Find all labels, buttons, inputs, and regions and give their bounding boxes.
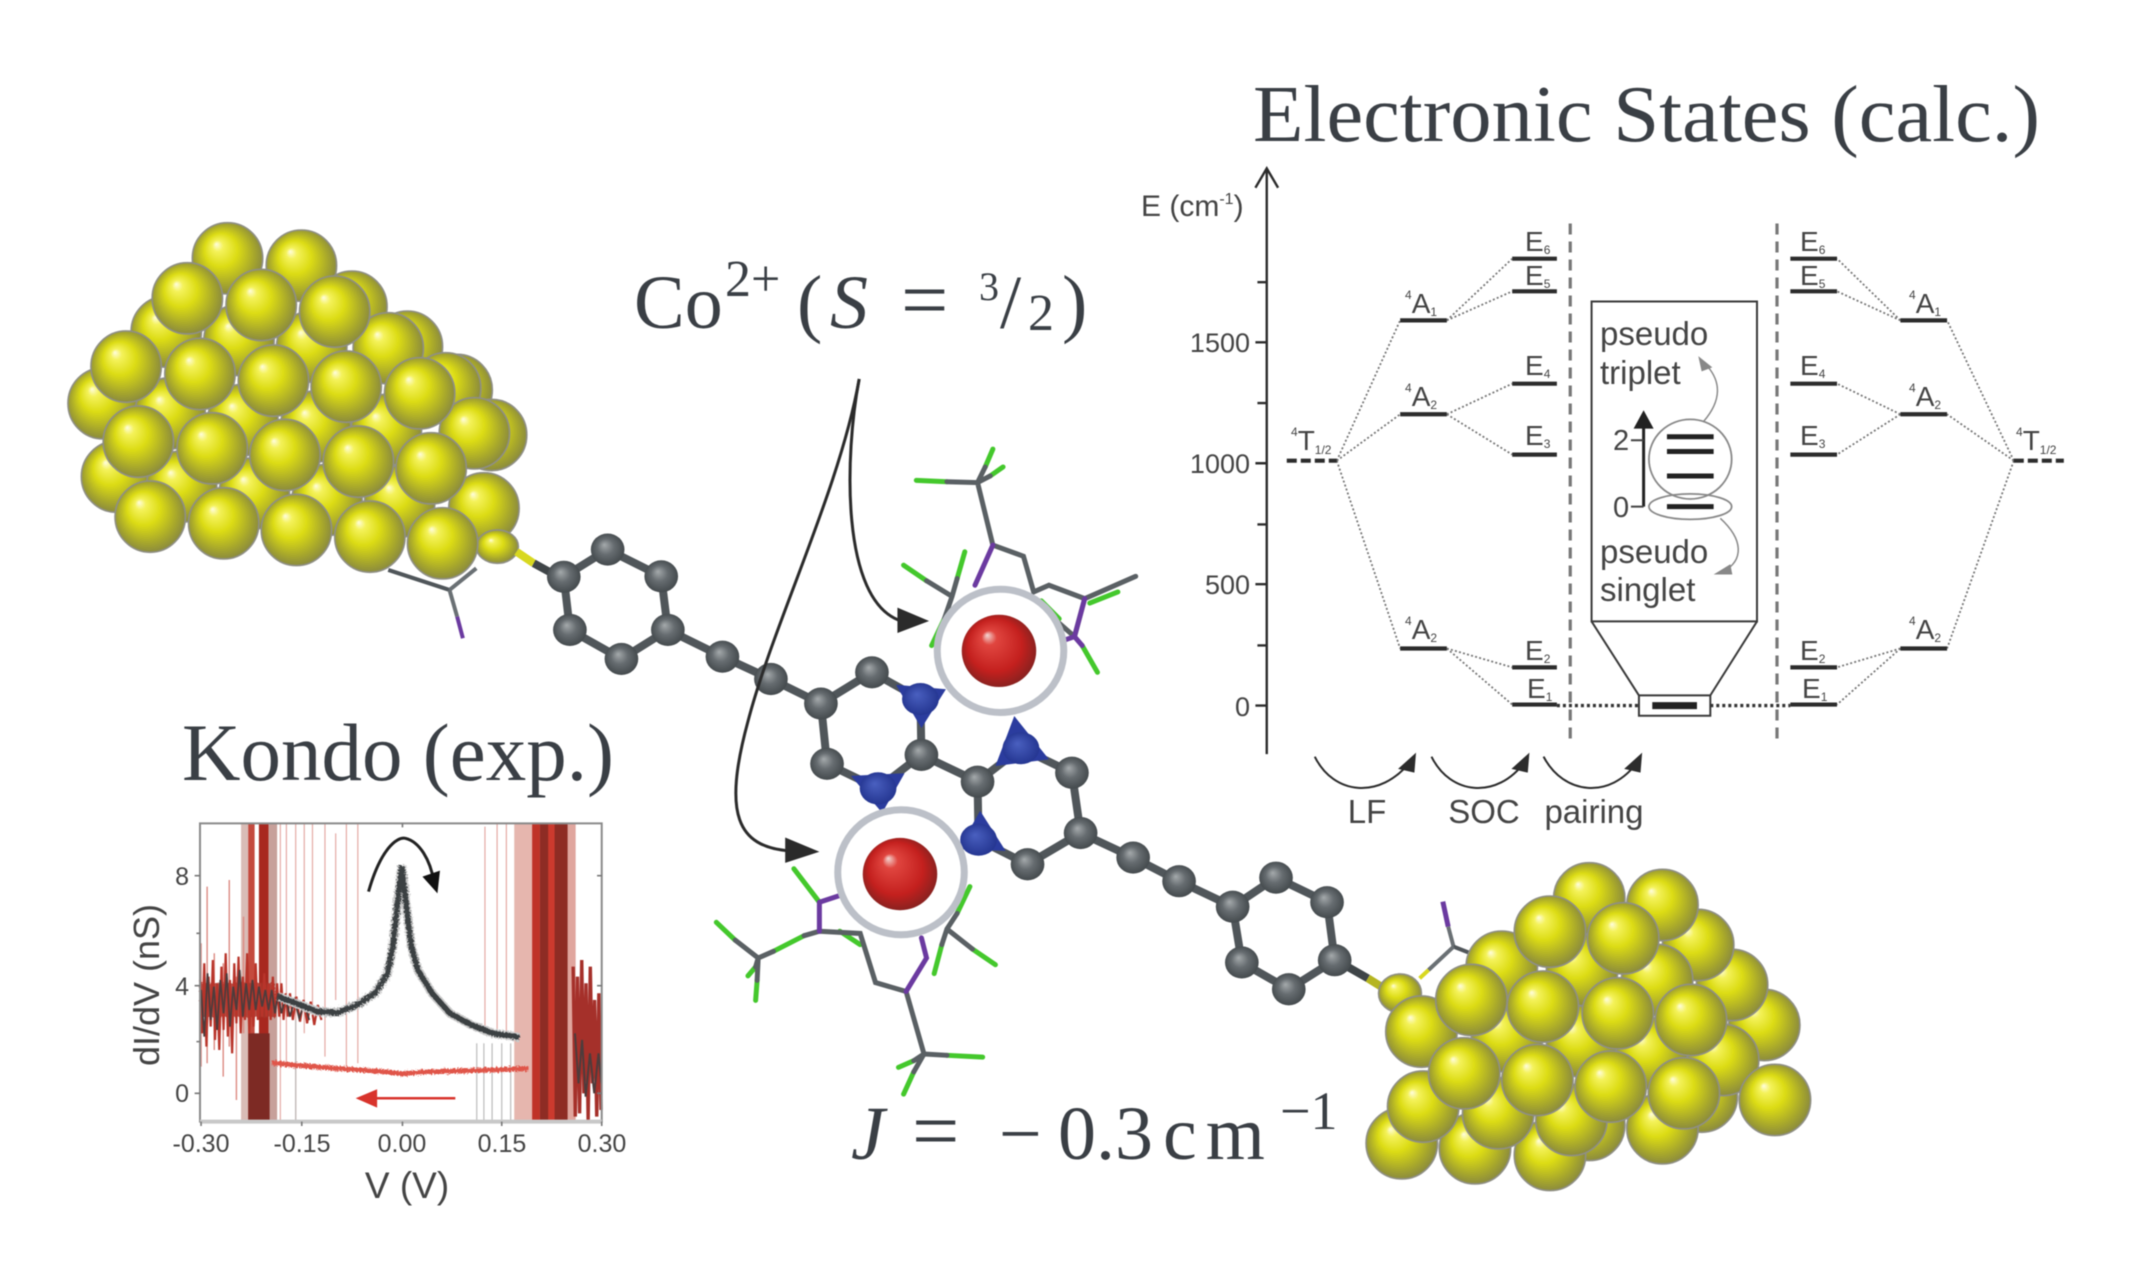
y tick labels: 0: [175, 1080, 189, 1108]
zoom box text: singlet: [1600, 571, 1695, 608]
axis label: -1: [1219, 191, 1234, 208]
process labels: LF: [1348, 793, 1386, 830]
level labels: 2: [1430, 398, 1437, 412]
zoom box text: 2: [1613, 425, 1629, 457]
level labels: E: [1802, 673, 1821, 704]
label: exchange coupling: =: [912, 1085, 959, 1178]
black sweep arrow: [369, 838, 440, 893]
level labels: E: [1527, 673, 1546, 704]
level labels: E: [1800, 260, 1819, 291]
tick labels: 500: [1205, 570, 1250, 600]
label: cobalt spin: 2: [1028, 285, 1054, 342]
carbon atoms: [547, 533, 1352, 1005]
level labels: 2: [1819, 652, 1826, 666]
axis label: ): [1234, 190, 1244, 223]
level labels: E: [1525, 350, 1544, 381]
diagram lines: [1255, 168, 2064, 788]
x tick labels: -0.30: [173, 1130, 229, 1158]
y tick labels: [175, 863, 189, 1108]
level labels: [1291, 226, 2057, 704]
energy levels: [1287, 259, 2064, 705]
level labels: E: [1800, 635, 1819, 666]
level labels: 4: [2016, 425, 2023, 439]
nitrogen atoms: [851, 683, 1049, 856]
label: exchange coupling: −1: [1280, 1081, 1337, 1141]
title: Electronic States (calc.): Electronic States (calc.): [1253, 71, 2040, 159]
level labels: 5: [1544, 277, 1551, 291]
level labels: 6: [1544, 243, 1551, 257]
energy axis: [1255, 168, 1278, 754]
label: exchange coupling: 0.3: [1058, 1092, 1153, 1176]
x tick labels: 0.30: [578, 1130, 626, 1158]
label: cobalt spin: /: [1000, 261, 1022, 345]
arrow to upper cobalt: [850, 379, 929, 633]
label: cobalt spin: ): [1062, 261, 1087, 345]
ligands on upper cobalt: [904, 449, 1136, 672]
dashed separators: [1570, 223, 1777, 744]
level labels: 1: [1430, 305, 1437, 319]
label: cobalt spin: 3: [979, 264, 999, 309]
level labels: T: [2023, 425, 2040, 456]
label: exchange coupling: cm: [1163, 1092, 1274, 1176]
level labels: 4: [1544, 367, 1551, 381]
level labels: A: [1916, 614, 1935, 645]
x tick labels: 0.15: [478, 1130, 526, 1158]
level labels: E: [1800, 226, 1819, 257]
energy level diagram: [1141, 168, 2064, 830]
level labels: 4: [1405, 288, 1412, 302]
x tick labels: -0.15: [274, 1130, 330, 1158]
level labels: 4: [1405, 381, 1412, 395]
y tick labels: 4: [175, 973, 189, 1001]
level labels: 2: [1544, 652, 1551, 666]
axis label: E (cm: [1141, 190, 1219, 223]
level labels: A: [1412, 288, 1431, 319]
cobalt ion lower: [838, 810, 964, 935]
level labels: 4: [1291, 425, 1298, 439]
tick labels: 1000: [1190, 449, 1250, 479]
pseudo-spin levels: [1631, 356, 1738, 574]
level labels: 3: [1544, 437, 1551, 451]
label: cobalt spin: 2+: [725, 251, 780, 308]
red sweep arrow: [356, 1089, 455, 1108]
gold electrode: right cluster: [1336, 863, 1811, 1191]
level labels: T: [1298, 425, 1315, 456]
x axis label: V (V): [365, 1165, 449, 1206]
bonds: [564, 550, 1335, 989]
ligands on lower cobalt: [716, 869, 995, 1094]
level labels: 5: [1819, 277, 1826, 291]
level labels: E: [1800, 420, 1819, 451]
label: exchange coupling: J: [851, 1092, 888, 1176]
level labels: 2: [1934, 398, 1941, 412]
label: cobalt spin: =: [901, 254, 948, 347]
zoom box text: triplet: [1600, 354, 1681, 391]
level labels: 1: [1546, 690, 1553, 704]
level labels: A: [1412, 614, 1431, 645]
dotted correlation lines: [1337, 259, 2014, 705]
process labels: [1348, 793, 1644, 830]
level labels: 4: [1909, 614, 1916, 628]
process arrows: [1315, 755, 1641, 788]
y tick labels: 8: [175, 863, 189, 891]
level labels: E: [1525, 420, 1544, 451]
level labels: 1: [1934, 305, 1941, 319]
level labels: 4: [1909, 288, 1916, 302]
zoom box: [1557, 302, 1790, 716]
level labels: E: [1525, 260, 1544, 291]
title: Kondo (exp.): Kondo (exp.): [182, 707, 614, 798]
level labels: A: [1412, 381, 1431, 412]
level labels: E: [1800, 350, 1819, 381]
level labels: E: [1525, 635, 1544, 666]
molecule: [547, 379, 1352, 1094]
label: cobalt spin: Co: [634, 261, 723, 345]
process labels: pairing: [1544, 793, 1644, 830]
y axis label: dI/dV (nS): [126, 904, 167, 1066]
level labels: 4: [1909, 381, 1916, 395]
level labels: E: [1525, 226, 1544, 257]
x tick labels: 0.00: [378, 1130, 426, 1158]
plot traces: [195, 823, 602, 1126]
level labels: 1: [1821, 690, 1828, 704]
zoom box text: 0: [1613, 492, 1629, 524]
level labels: 1/2: [1315, 443, 1332, 457]
label: cobalt spin: (: [797, 261, 822, 345]
process labels: SOC: [1448, 793, 1520, 830]
zoom box text: [1600, 315, 1708, 608]
level labels: 2: [1934, 631, 1941, 645]
level labels: 2: [1430, 631, 1437, 645]
chart: Kondo dI/dV trace: [126, 823, 626, 1206]
tick labels: [1190, 328, 1250, 722]
tick labels: 0: [1235, 692, 1250, 722]
zoom box text: pseudo: [1600, 315, 1708, 352]
level labels: 4: [1405, 614, 1412, 628]
cobalt ion upper: [937, 589, 1064, 712]
gold electrode: left cluster: [68, 223, 564, 638]
tick labels: 1500: [1190, 328, 1250, 358]
x tick labels: [173, 1130, 626, 1158]
level labels: A: [1916, 381, 1935, 412]
label: exchange coupling: −: [999, 1092, 1042, 1176]
level labels: 4: [1819, 367, 1826, 381]
label: cobalt spin: S: [830, 261, 868, 345]
level labels: 1/2: [2040, 443, 2057, 457]
level labels: 3: [1819, 437, 1826, 451]
level labels: 6: [1819, 243, 1826, 257]
zoom box text: pseudo: [1600, 533, 1708, 570]
level labels: A: [1916, 288, 1935, 319]
arrow to lower cobalt: [736, 379, 859, 863]
